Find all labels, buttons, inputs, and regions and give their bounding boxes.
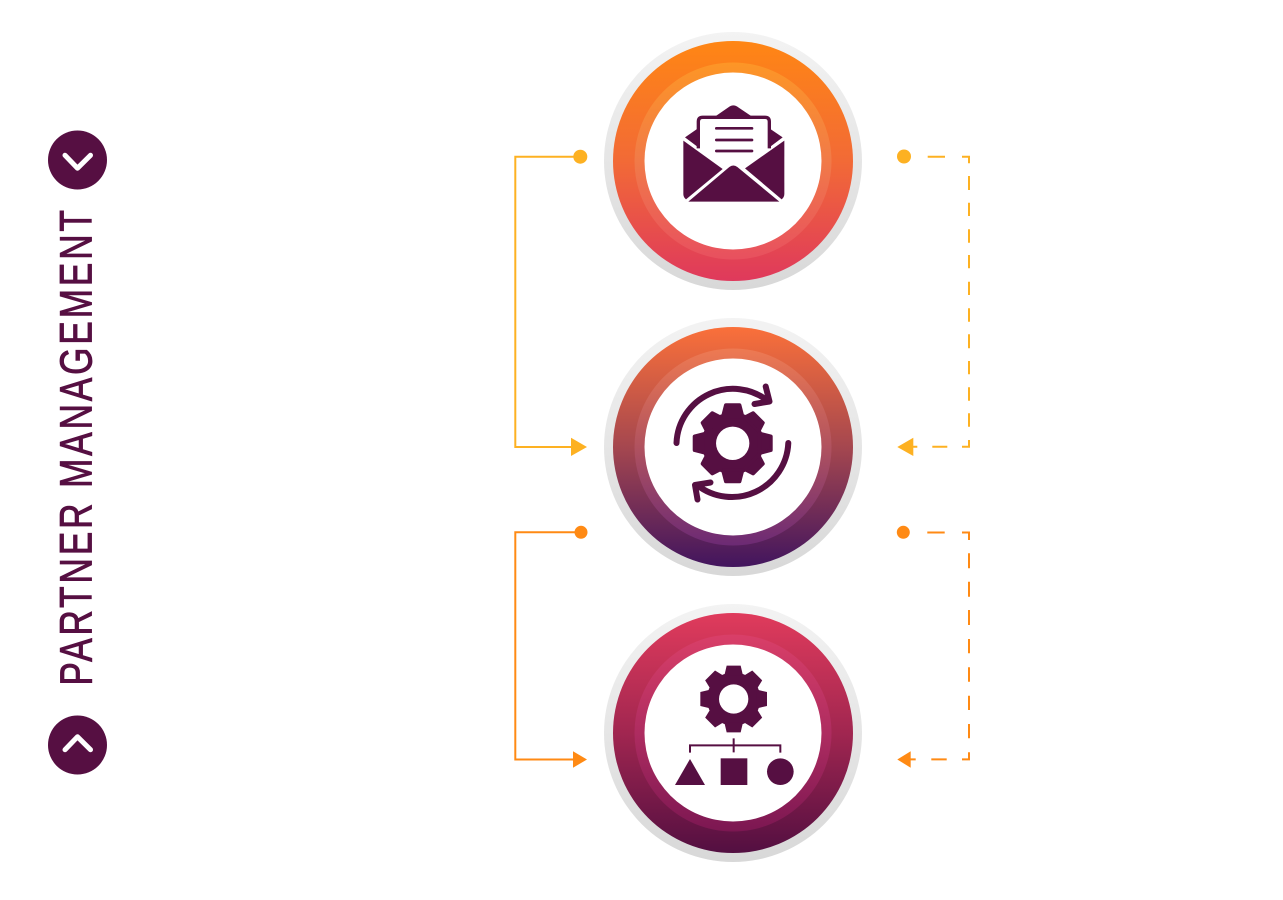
button: chevron up	[48, 716, 107, 774]
connector: bottom right dashed arrow	[897, 526, 969, 768]
connector: bottom left solid arrow	[515, 526, 588, 768]
panel: bottom circle	[604, 604, 862, 862]
panel: middle circle	[604, 318, 862, 576]
button: chevron down	[48, 130, 107, 190]
title: partner management: PARTNER MANAGEMENT	[50, 207, 102, 686]
panel: top circle	[604, 32, 862, 290]
connector: top right dashed arrow	[897, 150, 969, 456]
icon: gear with hierarchy of shapes	[675, 666, 794, 785]
icon: gear with cycle arrows	[676, 386, 788, 500]
connector: top left solid arrow	[515, 150, 587, 456]
icon: open envelope	[683, 105, 784, 202]
